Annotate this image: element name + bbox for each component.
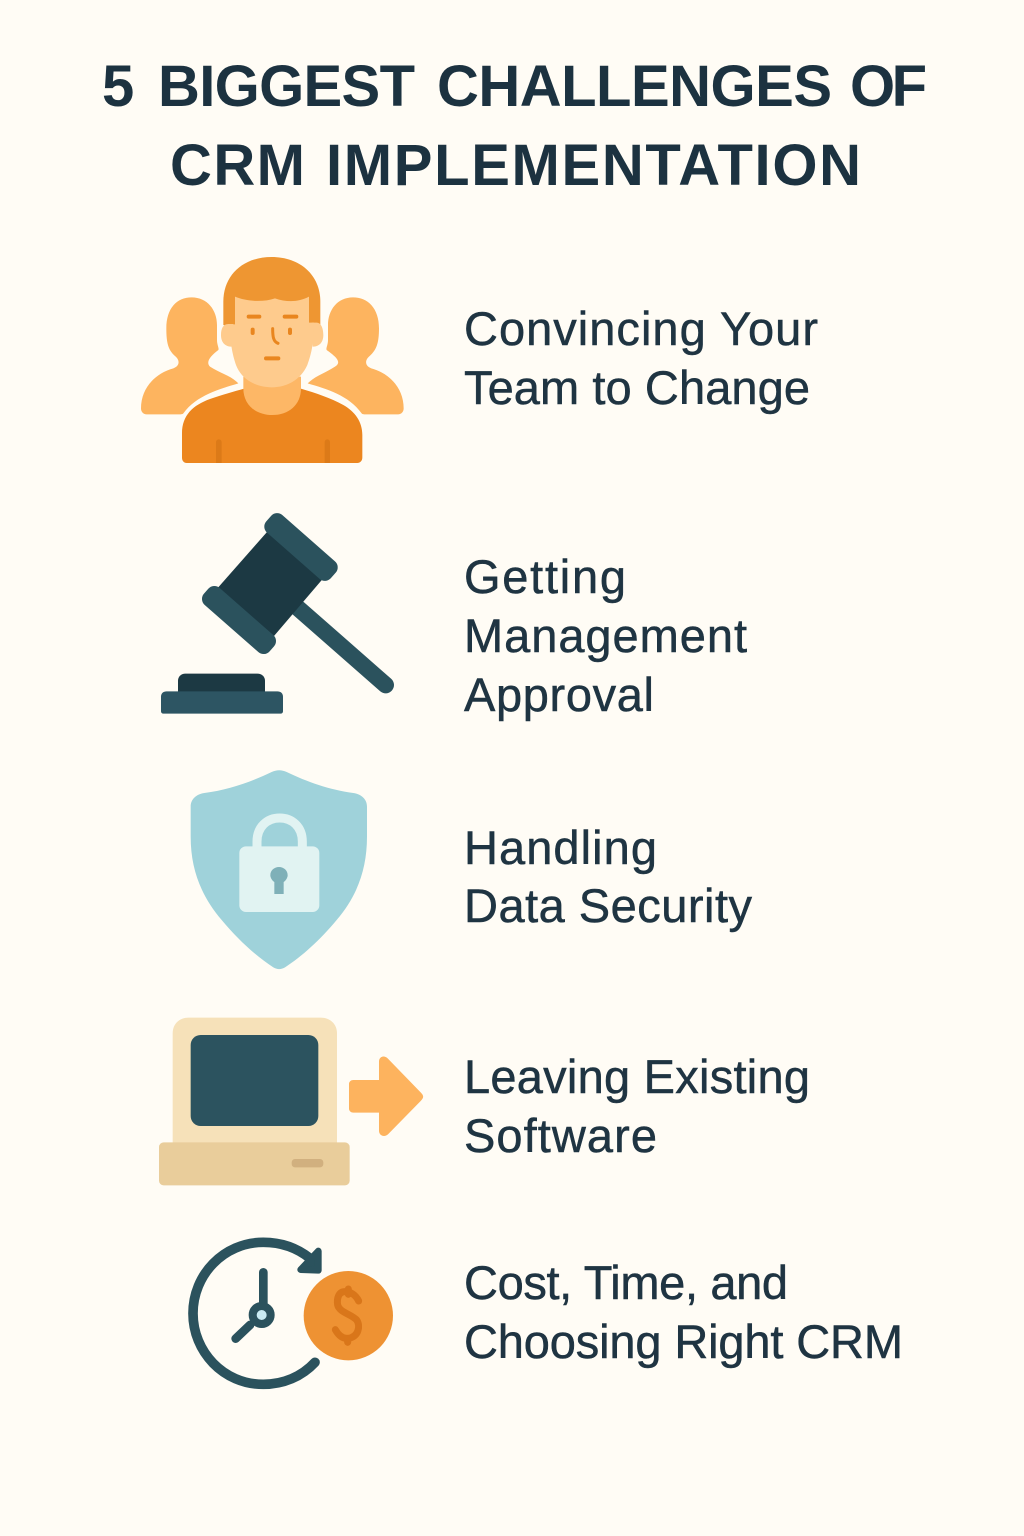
right background person [308,297,404,414]
label: management approval [464,550,747,721]
label: leaving existing software: Software [464,1109,657,1162]
gavel handle [298,608,386,685]
gavel head [218,532,322,636]
label: convincing your team [464,302,818,414]
label: cost, time, choosing CRM: Choosing Right CRM [464,1315,903,1368]
shirt seams [216,439,330,463]
label: management approval: Management [464,609,747,662]
label: data security [464,821,752,932]
title: CRM [170,133,305,198]
clock centre [253,1306,271,1324]
title: IMPLEMENTATION [326,133,861,198]
label: leaving existing software: Leaving Existing [464,1050,810,1103]
facial features [249,317,296,358]
label: management approval: Approval [464,668,654,721]
title: BIGGEST [158,54,415,119]
drive slot [292,1159,323,1167]
neck [243,377,301,415]
icon: legacy computer with exit arrow [159,1018,423,1185]
block top [178,674,265,693]
label: cost, time, choosing CRM: Cost, Time, and [464,1256,788,1309]
label: convincing your team: Team to Change [464,361,810,414]
icon: team with reluctant person [141,257,404,463]
coin [304,1271,393,1360]
left background person [141,297,238,414]
circular arrow ring [193,1242,315,1384]
computer base [159,1142,350,1185]
padlock shackle [257,818,302,848]
icon: clock cycle and dollar coin [193,1242,393,1384]
keyhole [270,867,288,894]
title: 5 [102,54,134,119]
monitor [173,1018,337,1143]
icon: security shield with padlock [191,770,367,969]
block base [161,691,283,714]
icon: gavel [161,510,386,714]
label: leaving existing software [464,1050,810,1162]
label: convincing your team: Convincing Your [464,302,818,355]
label: data security: Handling [464,821,657,874]
clock hands [236,1272,263,1339]
dollar sign [335,1289,359,1342]
shield [191,770,367,969]
arrowhead [301,1251,318,1270]
screen [191,1035,318,1126]
title: CHALLENGES [437,54,832,119]
gavel caps [261,510,341,584]
ears [221,323,323,347]
face [230,297,314,387]
label: data security: Data Security [464,879,752,932]
shirt [182,388,362,463]
arrow [349,1056,423,1136]
label: management approval: Getting [464,550,626,603]
hair [223,257,320,328]
label: cost, time, choosing CRM [464,1256,903,1368]
padlock body [239,846,319,912]
title [102,54,927,198]
title: OF [850,54,927,119]
